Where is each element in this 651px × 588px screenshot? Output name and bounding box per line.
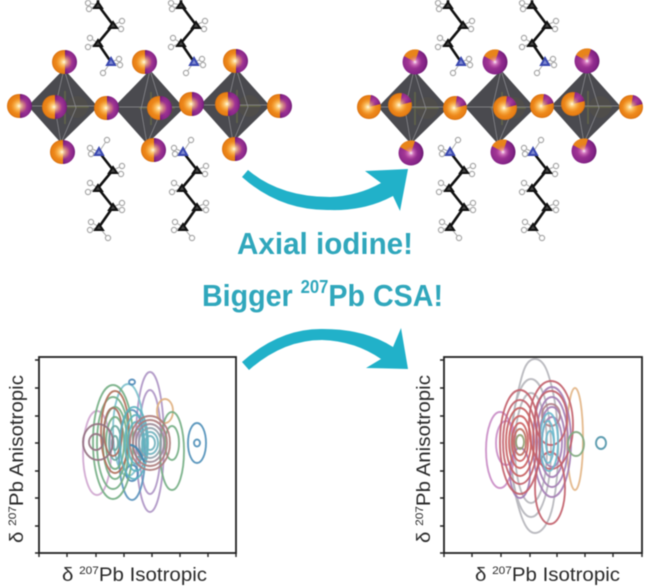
y axis label, right: δ [414, 532, 435, 543]
organic spacer chains, right [435, 0, 559, 241]
x axis label, left: δ [62, 565, 73, 586]
heading: Bigger 207Pb CSA: Bigger [202, 278, 300, 313]
y axis label, left: 207 [7, 506, 19, 526]
left contour plot [7, 357, 236, 586]
heading: Bigger 207Pb CSA: Pb CSA! [328, 278, 443, 313]
y axis label, right: Pb Anisotropic [414, 375, 435, 506]
y axis label, left: δ [7, 532, 28, 543]
x axis label, right: Pb Isotropic [512, 565, 620, 586]
arrow: bottom curved arrow [242, 328, 408, 370]
right crystal structure: axial iodine [357, 0, 643, 241]
heading: Bigger 207Pb CSA: 207 [301, 277, 328, 297]
lead iodide octahedra, right [378, 69, 621, 144]
iodine atoms, right [357, 48, 643, 166]
x axis label, left: Pb Isotropic [99, 565, 207, 586]
right contour plot [414, 357, 642, 586]
x axis label, right: δ [475, 565, 486, 586]
contours, left [83, 372, 206, 512]
y axis label, left: Pb Anisotropic [7, 375, 28, 506]
left crystal structure: equatorial iodine [7, 0, 292, 241]
y axis label, right: 207 [414, 506, 426, 526]
plot frame and ticks, left [35, 357, 236, 557]
organic spacer chains, left [85, 0, 209, 241]
contours, right [486, 359, 606, 533]
arrow: top curved arrow [242, 169, 408, 211]
heading: Axial iodine: Axial iodine! [237, 226, 413, 261]
plot frame and ticks, right [440, 357, 642, 557]
x axis label, left: 207 [79, 565, 99, 577]
lead iodide octahedra, left [28, 68, 270, 144]
iodine atoms, left [7, 49, 292, 164]
x axis label, right: 207 [492, 565, 512, 577]
